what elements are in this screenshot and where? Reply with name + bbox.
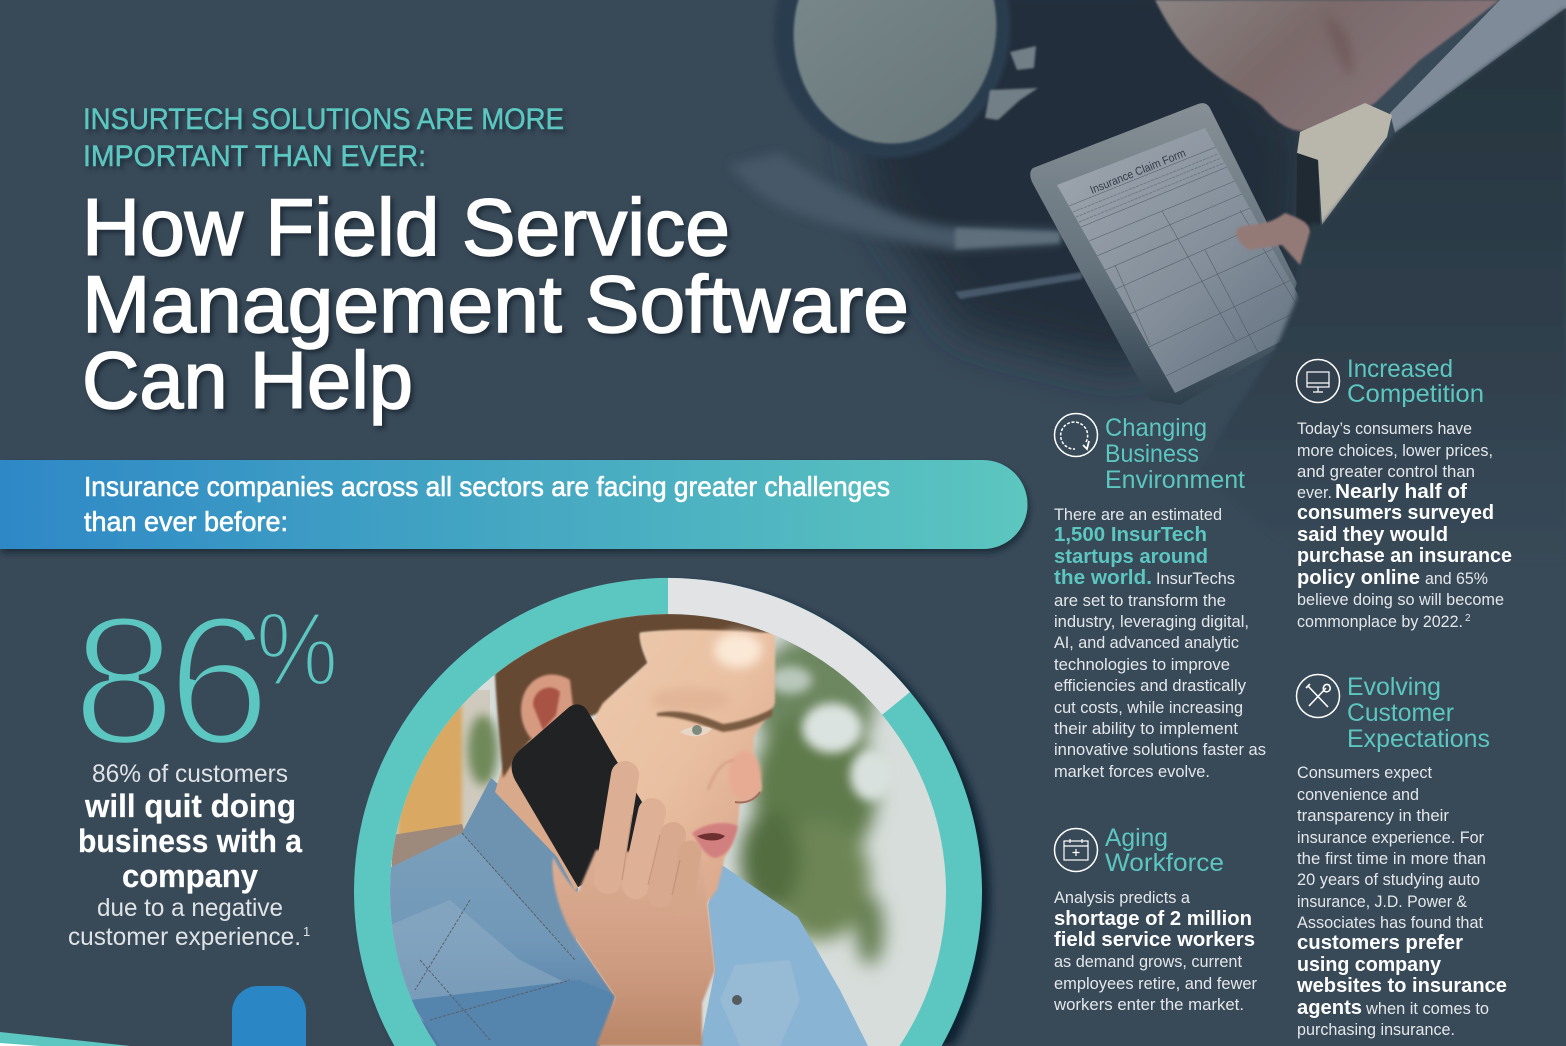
panel: increased competition: more choices, lower prices,: [1297, 441, 1493, 460]
panel: evolving customer expectations: Expectations: [1347, 725, 1490, 753]
title: How Field Service: [82, 183, 730, 273]
damaged car: [700, 0, 1310, 370]
statistic caption: company: [122, 858, 258, 894]
icon: wrench and screwdriver: [1296, 674, 1340, 718]
teal wedge bottom left: [0, 1032, 130, 1046]
big statistic: 86%: [72, 577, 338, 783]
panel: evolving customer expectations: 20 years of studying auto: [1297, 870, 1480, 889]
panel: aging workforce: field service workers: [1054, 929, 1255, 951]
panel: changing business environment: market forces evolve.: [1054, 762, 1210, 781]
panel: increased competition: believe doing so will become: [1297, 590, 1504, 609]
panel: evolving customer expectations: [1296, 673, 1507, 1039]
background photo: insurance adjuster with tablet: [736, 0, 1566, 430]
panel: evolving customer expectations: transparency in their: [1297, 806, 1449, 825]
panel: aging workforce: workers enter the market.: [1053, 995, 1244, 1014]
panel: changing business environment: innovative solutions faster as: [1054, 740, 1266, 759]
panel: changing business environment: InsurTechs: [1156, 569, 1235, 588]
panel: changing business environment: the world.: [1054, 567, 1152, 589]
panel: changing business environment: cut costs, while increasing: [1054, 698, 1243, 717]
panel: increased competition: Nearly half of: [1335, 481, 1467, 503]
panel: increased competition: Today’s consumers have: [1297, 419, 1472, 438]
panel: aging workforce: shortage of 2 million: [1054, 908, 1252, 930]
banner: than ever before:: [84, 506, 288, 537]
hair: [495, 613, 773, 778]
panel: increased competition: consumers surveyed: [1297, 502, 1494, 524]
panel: increased competition: said they would: [1297, 524, 1448, 546]
panel: increased competition: commonplace by 2022.: [1297, 612, 1463, 631]
statistic caption: 86% of customers: [92, 760, 288, 788]
title: [82, 183, 909, 426]
panel: evolving customer expectations: customers prefer: [1297, 932, 1463, 954]
panel: increased competition: [1296, 355, 1512, 631]
statistic caption: business with a: [78, 823, 302, 859]
panel: evolving customer expectations: websites to insurance: [1296, 975, 1507, 997]
ear: [521, 675, 574, 742]
panel: changing business environment: efficiencies and drastically: [1054, 676, 1246, 695]
panel: aging workforce: [1053, 824, 1257, 1014]
panel: aging workforce: as demand grows, current: [1054, 952, 1242, 971]
panel: evolving customer expectations: convenience and: [1297, 785, 1419, 804]
panel: increased competition: policy online: [1297, 567, 1420, 589]
banner: Insurance companies across all sectors are facing greater challenges: [84, 471, 890, 502]
title: Management Software: [82, 260, 909, 350]
decorative blue tab: [232, 986, 306, 1046]
tablet form title: Insurance Claim Form: [1089, 147, 1188, 197]
panel: evolving customer expectations: Evolving: [1347, 673, 1441, 701]
hand holding tablet: [1236, 213, 1310, 265]
icon: refresh circle: [1054, 414, 1098, 456]
man's head: [1155, 0, 1500, 131]
big statistic: 86%: 6: [167, 577, 271, 783]
tablet: [1030, 103, 1315, 405]
banner: [0, 460, 1028, 549]
panel: increased competition: Competition: [1347, 380, 1484, 408]
panel: aging workforce: Workforce: [1105, 849, 1224, 877]
panel: changing business environment: their ability to implement: [1054, 719, 1238, 738]
panel: changing business environment: are set to transform the: [1054, 591, 1226, 610]
panel: evolving customer expectations: when it comes to: [1365, 999, 1489, 1018]
heading: kicker: INSURTECH SOLUTIONS ARE MORE: [83, 103, 564, 136]
panel: aging workforce: Aging: [1105, 824, 1168, 852]
grey ring segment 14%: [668, 578, 910, 715]
denim shirt: [385, 778, 615, 1046]
statistic caption: due to a negative: [97, 894, 283, 922]
panel: changing business environment: [1054, 414, 1266, 781]
panel: changing business environment: Environment: [1105, 466, 1245, 494]
brow and eye: [657, 708, 773, 732]
hand: [552, 775, 715, 1046]
statistic caption: [68, 760, 310, 951]
panel: evolving customer expectations: purchasing insurance.: [1297, 1020, 1455, 1039]
panel: increased competition: and 65%: [1425, 569, 1488, 588]
panel: increased competition: 2: [1465, 613, 1471, 624]
phone: [512, 704, 650, 887]
panel: evolving customer expectations: the first time in more than: [1297, 849, 1486, 868]
panel: changing business environment: AI, and advanced analytic: [1054, 633, 1239, 652]
panel: changing business environment: Changing: [1105, 414, 1207, 442]
panel: evolving customer expectations: insurance experience. For: [1297, 828, 1484, 847]
panel: changing business environment: Business: [1105, 440, 1199, 468]
statistic caption: customer experience.: [68, 923, 301, 951]
big statistic: 86%: 8: [72, 577, 176, 783]
icon: monitor: [1296, 360, 1340, 402]
ring chart with photo of frustrated customer: [354, 578, 990, 1046]
big statistic: 86%: %: [256, 592, 338, 708]
panel: increased competition: and greater control than: [1297, 462, 1475, 481]
panel: evolving customer expectations: Consumers expect: [1297, 763, 1432, 782]
face: [580, 630, 775, 903]
statistic caption: will quit doing: [84, 788, 296, 824]
panel: aging workforce: Analysis predicts a: [1054, 888, 1191, 907]
neck: [495, 738, 579, 890]
mouth: [692, 823, 738, 858]
heading: kicker: IMPORTANT THAN EVER:: [83, 140, 426, 173]
panel: changing business environment: industry, leveraging digital,: [1054, 612, 1249, 631]
heading: kicker: [83, 103, 564, 173]
title: Can Help: [82, 336, 413, 426]
jacket: [1200, 8, 1566, 560]
panel: increased competition: purchase an insurance: [1297, 545, 1512, 567]
statistic caption: 1: [303, 924, 310, 939]
panel: changing business environment: technologies to improve: [1054, 655, 1230, 674]
icon: calendar: [1054, 828, 1098, 872]
panel: changing business environment: 1,500 InsurTech: [1054, 524, 1207, 546]
panel: increased competition: Increased: [1347, 355, 1453, 383]
photo: man on the phone: [380, 600, 960, 1046]
panel: evolving customer expectations: agents: [1297, 997, 1362, 1019]
panel: increased competition: ever.: [1297, 483, 1332, 502]
panel: aging workforce: employees retire, and fewer: [1054, 974, 1257, 993]
panel: changing business environment: There are an estimated: [1054, 505, 1222, 524]
panel: evolving customer expectations: insurance, J.D. Power &: [1297, 892, 1468, 911]
panel: changing business environment: startups around: [1054, 546, 1208, 568]
panel: evolving customer expectations: using company: [1297, 954, 1442, 976]
panel: evolving customer expectations: Associates has found that: [1297, 913, 1483, 932]
panel: evolving customer expectations: Customer: [1347, 699, 1454, 727]
